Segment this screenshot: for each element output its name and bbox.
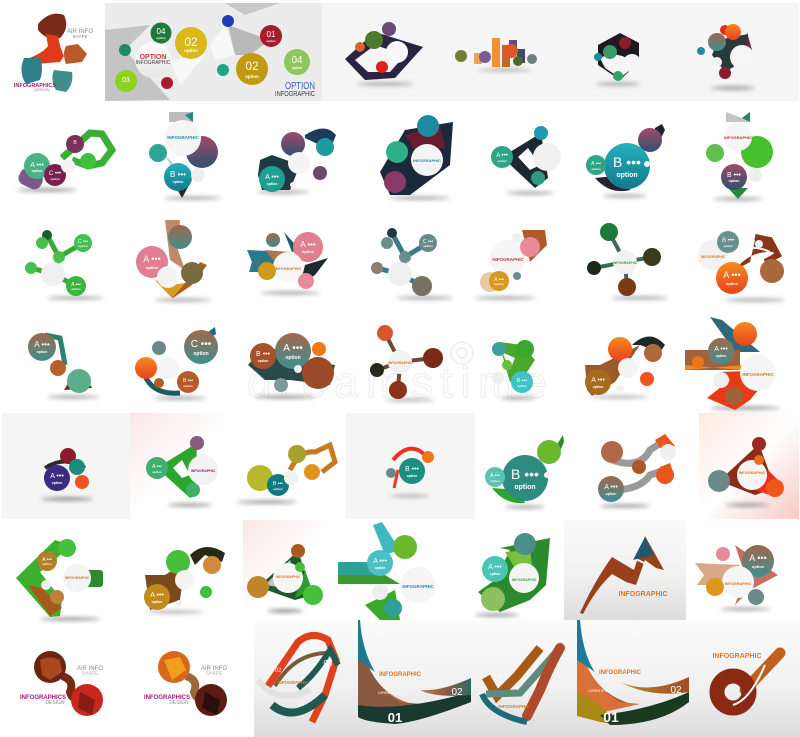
graphic: row six cell four teal (338, 522, 436, 620)
text: air info: SHAPE (72, 34, 88, 39)
bubble A (24, 153, 50, 179)
bubble A (66, 276, 86, 296)
white infographic bubble: INFOGRAPHIC (725, 582, 752, 586)
bubble A (37, 551, 57, 571)
text: ribbon numbers (378, 672, 463, 725)
graphic: row two cell three (257, 128, 336, 194)
bubble 02 yellow (175, 27, 207, 59)
bubble A: A ••• (591, 377, 605, 384)
graphic: row two cell two (149, 112, 221, 200)
bubble A: A ••• (488, 564, 502, 571)
graphic: bars infographic (455, 38, 537, 72)
bubble A: option (726, 281, 739, 286)
bubble B big: option (514, 484, 536, 491)
bubble A: A ••• (604, 484, 618, 491)
bubble 02 dark yellow: 02 (245, 59, 259, 73)
text: option infographic (275, 81, 315, 98)
text: checkmark labels (497, 674, 531, 709)
bubble C: C ••• (191, 339, 212, 350)
graphic: row two cell seven green (706, 112, 773, 200)
bubble 04 green: option (156, 36, 166, 40)
text: air info (77, 666, 103, 677)
bubble A: option (152, 600, 162, 604)
white center bubble: OPTION (140, 54, 166, 61)
graphic: row four cell one (28, 333, 99, 398)
text: infographics design: INFOGRAPHICS (144, 695, 190, 701)
graphic: curved ribbon one (358, 620, 471, 725)
panel: row six backgrounds (243, 520, 686, 620)
graphic: row five cell seven triangle (708, 437, 784, 506)
text: air info: SHAPE (206, 671, 223, 677)
graphic: row four cell seven orange band (685, 317, 780, 410)
white infographic bubble: INFOGRAPHIC (613, 261, 638, 265)
text: ribbon labels: 03 (324, 659, 333, 668)
bubble C (419, 234, 437, 252)
bubble A: option (716, 354, 726, 358)
text: ring heading: INFOGRAPHIC (712, 653, 762, 660)
text: ribbon numbers: INFOGRAPHIC (379, 672, 422, 678)
bubble A: A ••• (494, 277, 504, 283)
white infographic bubble: INFOGRAPHIC (413, 158, 441, 163)
graphic: row three arrows pink (247, 232, 328, 294)
bubble blue (222, 15, 234, 27)
text: infographics design: DESIGN (169, 700, 189, 706)
bubble A: A ••• (150, 592, 164, 599)
bubble B (511, 371, 533, 393)
graphic: ring with handle (712, 653, 780, 708)
watermark: dreamstime (247, 358, 547, 407)
bubble A: option (152, 470, 162, 474)
bubble A: A ••• (714, 346, 728, 353)
text: infographics design: INFOGRAPHICS (14, 83, 56, 89)
white infographic bubble: INFOGRAPHIC (275, 267, 302, 271)
graphic: row six cell five green (475, 533, 550, 616)
bubble A: A ••• (373, 558, 387, 565)
text: ribbon numbers: INFOGRAPHIC (599, 670, 642, 676)
bubble B (164, 163, 192, 191)
graphic: row four cell three (248, 333, 335, 398)
bubble C: C ••• (423, 239, 433, 245)
text: infographic: INFOGRAPHIC (276, 575, 301, 579)
text: air info: AIR INFO (77, 666, 103, 672)
bubble A (275, 333, 311, 369)
text: ribbon numbers: LOREM IPSUM (378, 691, 402, 695)
white center bubble: INFOGRAPHIC (136, 60, 171, 66)
graphic: row five cell one (41, 448, 93, 500)
graphic: row three splash (475, 230, 547, 300)
text: infographics design: DESIGN (45, 700, 65, 706)
bubble B: option (729, 179, 739, 183)
bubble A: option (71, 287, 81, 291)
bubble A: option (752, 564, 765, 569)
text: ribbon numbers: 01 (603, 709, 619, 725)
white infographic bubble: INFOGRAPHIC (701, 255, 726, 259)
bubble A: A ••• (34, 340, 50, 349)
bubble A: option (490, 479, 500, 483)
graphic: looped ribbon (258, 635, 338, 722)
bubble A (146, 457, 168, 479)
text: option infographic: INFOGRAPHIC (275, 91, 315, 98)
bubble A: option (375, 566, 385, 570)
bubble B: option (173, 180, 183, 184)
bubble A: A ••• (30, 162, 44, 169)
bubble A (136, 246, 168, 278)
text: ribbon numbers (588, 670, 682, 725)
bubble A (482, 556, 508, 582)
white infographic bubble: INFOGRAPHIC (191, 469, 216, 473)
graphic: row three teal network (371, 228, 453, 300)
bubble B (721, 164, 747, 190)
bubble A: option (591, 167, 601, 171)
text: air info (201, 666, 227, 677)
bubble A: option (593, 385, 603, 389)
bubble A: A ••• (723, 270, 741, 280)
graphic: checkmark ribbons (482, 648, 560, 722)
graphic: row two cell four (380, 115, 453, 200)
text: infographics design (14, 83, 56, 92)
bubble B: option (407, 474, 417, 478)
text: infographic: INFOGRAPHIC (739, 471, 766, 475)
graphic: row six cell seven (695, 545, 778, 610)
graphic: row three orange (698, 231, 785, 302)
text: air info: AIR INFO (67, 29, 93, 35)
bubble B: B ••• (517, 378, 527, 384)
bubble B: option (258, 359, 268, 363)
text: ribbon infographic: INFOGRAPHIC (618, 591, 668, 598)
text: infographics design (144, 695, 190, 706)
graphic: air info orange (144, 651, 227, 716)
bubble B (717, 231, 739, 253)
bubble lime: 03 (122, 77, 130, 84)
bubble B: B ••• (170, 170, 186, 179)
graphic: row six cell one green arrow (16, 539, 103, 620)
bubble A (144, 584, 170, 610)
bubble A: A ••• (496, 153, 508, 159)
graphic: row six cell six zigzag ribbon (580, 536, 668, 614)
bubble teal small (119, 44, 131, 56)
white infographic bubble: INFOGRAPHIC (388, 361, 413, 365)
bubble teal (217, 64, 229, 76)
bubble A (259, 166, 285, 192)
bubble A (708, 338, 734, 364)
graphic: row two cell five triangle (491, 126, 561, 194)
bubble A (742, 545, 774, 577)
bubble A (28, 333, 56, 361)
bubble A: A ••• (50, 473, 64, 480)
bubble B: B (73, 140, 77, 146)
text: air info: AIR INFO (201, 666, 227, 672)
panel: gray option background (105, 3, 322, 101)
bubble B: B ••• (256, 351, 271, 358)
bubble C (44, 164, 66, 186)
bubble D: option (273, 487, 283, 491)
text: checkmark labels: 01 (497, 674, 503, 680)
text: ribbon numbers: 01 (388, 710, 402, 725)
bubble A: option (146, 265, 159, 270)
bubble B: B ••• (722, 238, 734, 244)
bubble 02 yellow: 02 (184, 35, 198, 49)
bubble A: A ••• (490, 473, 500, 479)
bubble 04 light green: 04 (291, 55, 303, 66)
bubble A: option (285, 355, 301, 361)
bubble A (489, 271, 509, 291)
bubble C: option (423, 244, 433, 248)
bubble 01 red: option (266, 39, 276, 43)
graphic: row five cell two green triangle (146, 436, 218, 506)
bubble A: option (494, 282, 504, 286)
text: option infographic: OPTION (285, 81, 315, 92)
text: ribbon numbers: 02 (670, 685, 682, 696)
panel: bottom gray background (254, 620, 800, 737)
text: ribbon labels (275, 659, 333, 707)
bubble A (598, 476, 624, 502)
bubble A: option (497, 159, 507, 163)
bubble B: option (183, 384, 193, 388)
graphic: row six cell three triangle (247, 544, 323, 612)
graphic: row three dark network (587, 223, 668, 300)
white infographic bubble: INFOGRAPHIC (724, 135, 752, 140)
text: checkmark labels: INFOGRAPHIC (498, 704, 531, 709)
bubble A: A ••• (71, 282, 81, 288)
text: ribbon numbers: LOREM IPSUM (588, 689, 612, 693)
graphic: row four cell six orange (585, 336, 665, 398)
bubble A (485, 467, 505, 487)
bubble 02 dark yellow: option (245, 74, 259, 79)
bubble A (367, 550, 393, 576)
graphic: diamond infographic (345, 22, 423, 86)
graphic: row four cell five green star (492, 340, 536, 400)
graphic: row three pink V (136, 220, 211, 302)
graphic: option bubbles on gray (115, 15, 315, 98)
bubble A (44, 465, 70, 491)
graphic: row four cell four (370, 325, 443, 402)
bubble B: B ••• (405, 466, 420, 473)
bubble 04 green: 04 (157, 27, 166, 36)
panel: row five backgrounds (2, 413, 799, 519)
bubble A (716, 262, 748, 294)
bubble B (399, 458, 425, 484)
bubble A: option (32, 169, 42, 173)
bubble 04 green (150, 22, 172, 44)
bubble B (177, 371, 199, 393)
bubble A: A ••• (591, 161, 601, 167)
bubble A: A ••• (283, 343, 303, 354)
graphic: row five cell five big B (485, 435, 564, 508)
graphic: row four cell two (135, 327, 218, 400)
bubble D (267, 474, 289, 496)
text: infographics design: DESIGN (34, 87, 50, 92)
bubble A (293, 232, 323, 262)
graphic: air info shape top left (14, 14, 93, 92)
bubble B big: B ••• (613, 154, 641, 170)
bubble B: B ••• (183, 378, 193, 384)
bubble B big (502, 455, 548, 501)
bubble A: A ••• (143, 254, 161, 264)
bubble C: C ••• (78, 239, 88, 245)
bubble C (74, 234, 92, 252)
white infographic bubble: INFOGRAPHIC (492, 257, 525, 262)
bubble A: option (606, 492, 616, 496)
text: infographics design: INFOGRAPHICS (20, 695, 66, 701)
bubble C: C ••• (49, 171, 61, 177)
text: ribbon numbers: 02 (451, 687, 463, 698)
bubble A: option (490, 572, 500, 576)
bubble A: option (37, 350, 47, 354)
bubble B big: option (616, 172, 638, 179)
panel: light gray strip (322, 3, 799, 101)
bubble 02 yellow: option (184, 48, 198, 53)
bubble B big: B ••• (511, 466, 539, 482)
bubble B: option (723, 244, 733, 248)
white center bubble (135, 42, 171, 78)
text: air info: SHAPE (82, 671, 99, 677)
bubble lime (115, 70, 137, 92)
text: infographics design (20, 695, 66, 706)
white infographic bubble: INFOGRAPHIC (402, 584, 435, 589)
graphic: row five cell four red arc (386, 449, 434, 498)
white infographic bubble: INFOGRAPHIC (512, 578, 537, 582)
bubble A: option (267, 182, 277, 186)
graphic: row two cell one (16, 133, 112, 192)
bubble A: option (52, 481, 62, 485)
bubble B (250, 343, 276, 369)
bubble A (586, 155, 606, 175)
graphic: row two cell six big B (586, 124, 665, 198)
bubble B: option (517, 384, 527, 388)
bubble A (585, 369, 611, 395)
bubble C (184, 330, 218, 364)
white infographic bubble: INFOGRAPHIC (167, 135, 200, 140)
bubble 02 dark yellow (236, 53, 268, 85)
bubble C: option (78, 244, 88, 248)
graphic: row five cell three (237, 445, 335, 504)
graphic: curved ribbon two (577, 620, 689, 725)
white infographic bubble: INFOGRAPHIC (742, 372, 775, 377)
graphic: air info dark red (20, 651, 103, 716)
bubble 04 light green (284, 49, 310, 75)
bubble A: A ••• (42, 557, 52, 563)
white infographic bubble: INFOGRAPHIC (65, 576, 90, 580)
bubble A (491, 146, 513, 168)
bubble A: option (302, 249, 315, 254)
bubble A: A ••• (300, 240, 316, 249)
graphic: row five cell six S ribbons (598, 434, 676, 508)
graphic: row three green network (25, 230, 103, 300)
bubble dark red small (161, 77, 173, 89)
bubble B: B ••• (727, 172, 742, 179)
graphic: row six cell two (144, 547, 225, 614)
graphic: clustered bubbles top right (697, 24, 755, 90)
text: air info (67, 29, 93, 39)
graphic: hexagon infographic (594, 33, 641, 86)
bubble D: B ••• (273, 481, 283, 487)
bubble 01 red (260, 25, 282, 47)
bubble A: A ••• (749, 553, 767, 563)
text: ribbon labels: 01 (297, 700, 305, 707)
bubble C: option (193, 351, 209, 357)
text: ribbon labels: 02 (275, 668, 282, 674)
bubble C: option (50, 177, 60, 181)
bubble A: A ••• (265, 174, 279, 181)
bubble 01 red: 01 (267, 30, 276, 39)
bubble A: A ••• (152, 464, 162, 470)
bubble B big (604, 143, 650, 189)
bubble A: option (42, 562, 52, 566)
text: ribbon labels: INFOGRAPHIC (277, 680, 310, 685)
bubble 04 light green: option (292, 66, 302, 70)
